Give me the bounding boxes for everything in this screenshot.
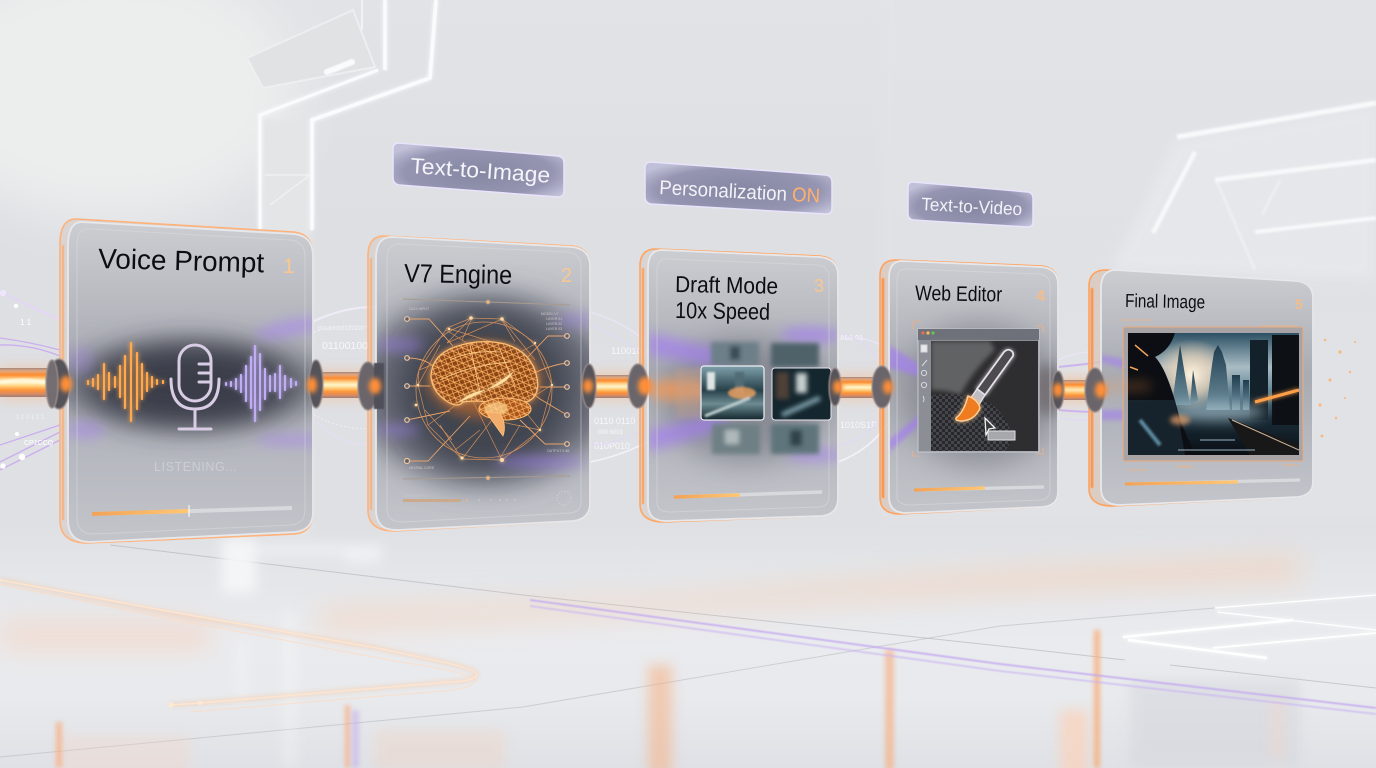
- glow conduit: 1 to 2: [314, 370, 374, 400]
- data stream: binary labels: 010P010: [594, 441, 630, 451]
- data stream: left: [0, 290, 60, 470]
- data stream: binary labels: AS1 01: [840, 335, 863, 342]
- second draft thumbnail: [772, 368, 831, 420]
- light trail on floor: [0, 580, 477, 712]
- card 3: Draft Mode: [640, 245, 843, 525]
- neon architecture left: [247, 0, 436, 230]
- neon architecture right: [1153, 103, 1376, 270]
- label pill: Personalization ON: [645, 162, 832, 214]
- card 4: Web Editor: [880, 255, 1061, 520]
- card 4 back plate: [880, 260, 1058, 514]
- card 5 glass: [1102, 271, 1312, 504]
- card 2 title: V7 Engine: [404, 258, 512, 290]
- card 4 progress bar: [914, 487, 1044, 490]
- neon floor frame: [1123, 595, 1376, 658]
- card 1 progress bar: [92, 505, 292, 517]
- footer meter: [403, 491, 571, 505]
- card 5: Final Image: [1089, 265, 1320, 510]
- technical micro labels: LAYER 02: [546, 322, 562, 326]
- label pill: Text-to-Image: [393, 143, 564, 197]
- card 3 number: 3: [814, 276, 824, 296]
- blurred draft thumbnails: [676, 342, 819, 454]
- data stream: swirl lines: [312, 307, 1101, 462]
- card 3 title: Draft Mode: [675, 271, 778, 299]
- label pill: Personalization ON: Personalization ON: [659, 177, 821, 207]
- label pill: Text-to-Video: Text-to-Video: [921, 194, 1023, 219]
- technical micro labels: LAYER 01: [546, 317, 562, 321]
- label pill: Text-to-Video: [908, 182, 1033, 227]
- data stream: binary labels: 000 6001: [598, 430, 624, 436]
- network globe: [416, 318, 552, 460]
- card 1 number: 1: [283, 255, 295, 278]
- listening status: LISTENING...: [154, 460, 237, 474]
- card 1 glass: [68, 223, 312, 541]
- paintbrush icon: [956, 350, 1013, 421]
- card 5 progress bar: [1125, 480, 1300, 484]
- brain icon: [427, 342, 543, 436]
- data stream: left: CP1CCQ: [24, 440, 54, 447]
- card 3 progress bar: [674, 492, 822, 497]
- card 1 back plate: [60, 219, 313, 543]
- selected draft thumbnail: [701, 366, 764, 420]
- data stream: binary labels: 01100100: [322, 340, 368, 352]
- sparkle particles: right: [1318, 339, 1356, 437]
- card 1 title: Voice Prompt: [98, 243, 265, 278]
- technical micro labels: OUTPUT 0.98: [547, 449, 569, 453]
- card 2 number: 2: [561, 265, 572, 287]
- card 5 number: 5: [1295, 296, 1303, 312]
- cursor: [985, 418, 995, 435]
- apply button: [988, 431, 1015, 440]
- purple waveform: [226, 346, 296, 421]
- label pill: Text-to-Image: Text-to-Image: [410, 153, 551, 188]
- card 3 glass: [648, 251, 838, 520]
- card 4 glass: [890, 262, 1058, 512]
- technical micro labels: MODEL V7: [541, 312, 559, 316]
- technical micro labels: LAYER 03: [546, 327, 562, 331]
- micro captions: [1119, 319, 1298, 471]
- card 1: Voice Prompt: [59, 218, 314, 544]
- top and bottom rules: [403, 299, 570, 480]
- card 3 back plate: [640, 249, 838, 522]
- floor reflections: [0, 558, 1300, 768]
- glow conduit: 3 to 4: [836, 374, 890, 400]
- card 5 title: Final Image: [1125, 291, 1205, 313]
- technical micro labels: LOAD 100 PCT: [403, 494, 428, 498]
- white pillar base: [222, 538, 382, 768]
- data stream: binary labels: 1010S1P: [840, 420, 877, 430]
- glow conduit: 2 to 3: [590, 372, 650, 400]
- image frame: [1123, 327, 1303, 461]
- callout leader lines: [404, 317, 569, 464]
- data stream: binary labels: [318, 326, 877, 451]
- glow conduit: 4 to 5: [1056, 377, 1098, 403]
- data stream: left: 1 1 0 1 1 1: [16, 415, 45, 421]
- card 4 number: 4: [1036, 288, 1045, 305]
- glow conduit: left: [0, 366, 52, 400]
- technical micro labels: DATA INPUT: [409, 307, 430, 311]
- card 3 title: [675, 271, 778, 325]
- data stream: binary labels: 0110 0110: [594, 416, 635, 426]
- card 4 title: Web Editor: [915, 282, 1002, 307]
- data stream: binary labels: 1100100: [611, 346, 647, 357]
- technical micro labels: NEURAL CORE: [409, 466, 435, 470]
- data stream: left: 1 1: [20, 318, 32, 327]
- technical micro labels: [403, 307, 569, 511]
- network nodes: [415, 316, 553, 462]
- floor: [0, 510, 1376, 768]
- city image: [1128, 333, 1299, 455]
- card 2 glass: [376, 238, 590, 529]
- data stream: binary labels: 00110010101100: [318, 326, 364, 332]
- card 5 back plate: [1089, 270, 1313, 506]
- card 2 back plate: [368, 236, 590, 531]
- microphone icon: [171, 345, 219, 429]
- technical micro labels: STATUS: [403, 507, 417, 511]
- editor window: [918, 329, 1039, 452]
- purple floor lines: [530, 600, 1376, 714]
- card 3 title: 10x Speed: [675, 297, 770, 325]
- card 2: V7 Engine: [367, 235, 591, 532]
- orange waveform: [88, 343, 163, 421]
- crop corners: [913, 321, 1043, 456]
- glowing streak: image output: [1060, 386, 1150, 388]
- connector rings: [46, 359, 1107, 412]
